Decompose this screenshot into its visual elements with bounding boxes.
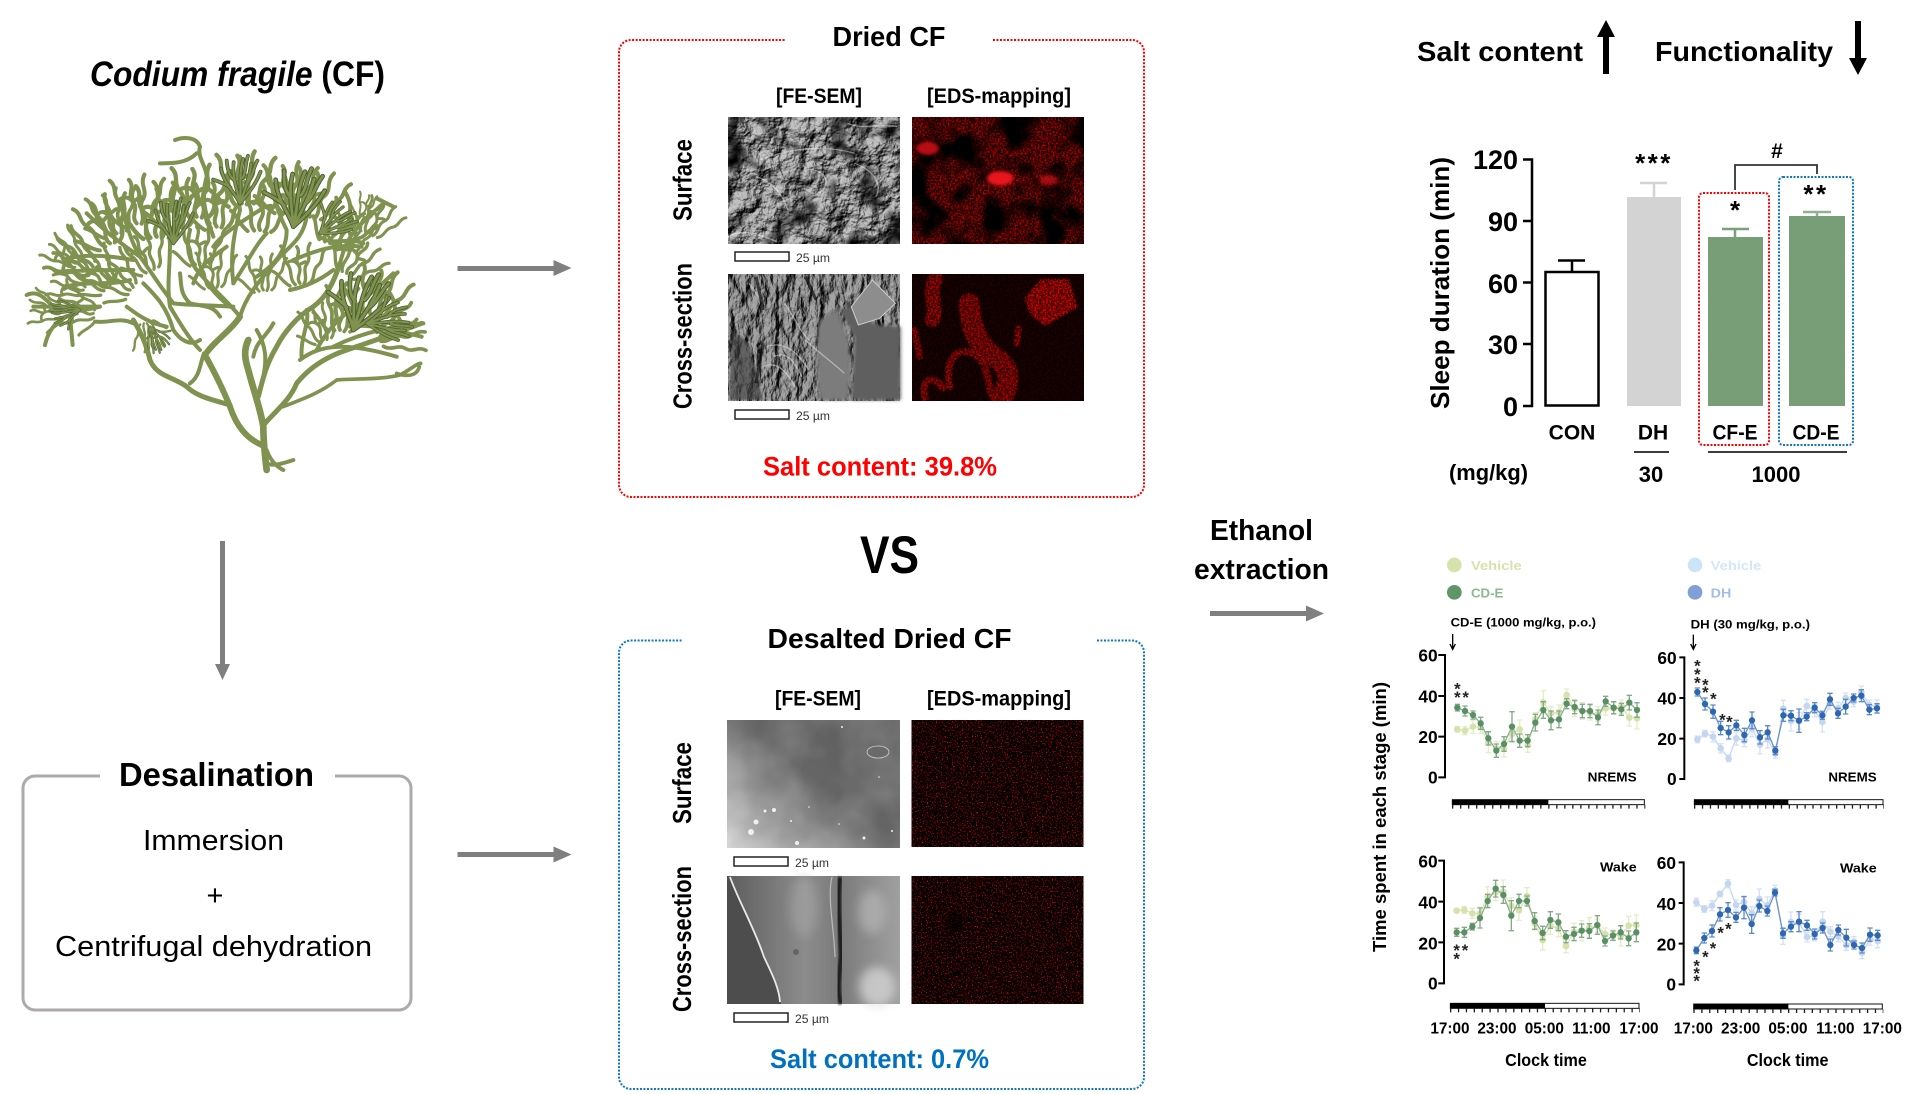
axis: 20: [1657, 935, 1676, 955]
bar: DH: [1627, 183, 1681, 406]
scale bar: cross-section: [735, 409, 830, 423]
line chart: Wake DH: [1657, 853, 1902, 1070]
time axis labels: [1430, 1020, 1659, 1037]
scale bar: surface: 25 µm: [796, 251, 830, 265]
axis: 60: [1657, 648, 1677, 668]
dosing annotation: DH (30 mg/kg, p.o.): [1691, 617, 1810, 631]
label: ethanol extraction: [1194, 515, 1329, 586]
line chart: NREMS CD-E: [1418, 558, 1645, 807]
column headers: [EDS-mapping]: [927, 688, 1071, 710]
y axis: 90: [1488, 207, 1518, 237]
micrograph: EDS surface: [912, 720, 1084, 847]
time axis labels: 05:00: [1768, 1020, 1808, 1037]
bar: CF-E: [1708, 229, 1763, 406]
series: DH: [1695, 688, 1880, 755]
arrow: to results: [1210, 606, 1324, 622]
significance stars: ********: [1694, 657, 1733, 732]
micrograph: EDS cross-section: [912, 274, 1084, 401]
legend: Vehicle: [1711, 558, 1761, 573]
significance stars: ***: [1635, 148, 1673, 178]
axis: 40: [1657, 894, 1676, 914]
time axis labels: 17:00: [1430, 1020, 1470, 1037]
title: Codium fragile (CF): [90, 55, 385, 94]
column headers: [776, 85, 1071, 108]
heading: desalted dried CF: Desalted Dried CF: [768, 623, 1012, 654]
legend: CD-E: [1471, 585, 1503, 600]
series: CD-E: [1454, 880, 1639, 946]
legend: Vehicle: [1471, 558, 1522, 573]
row label: cross-section: Cross-section: [668, 263, 698, 409]
bar chart: sleep duration: [1425, 140, 1853, 487]
text: steps: Immersion: [143, 825, 284, 857]
series: CD-E: [1455, 695, 1640, 757]
x axis title: Clock time: [1747, 1050, 1829, 1070]
header: functionality down: Functionality: [1655, 36, 1833, 67]
column headers: [775, 688, 1071, 710]
significance stars: *: [1730, 195, 1741, 225]
line chart: NREMS DH: [1657, 558, 1884, 807]
axis: 40: [1418, 686, 1438, 706]
axis: [1418, 851, 1444, 993]
highlight: CF-E: [1699, 193, 1769, 445]
light/dark bar: [1452, 800, 1645, 807]
series: vehicle: [1695, 686, 1880, 762]
significance stars: *******: [1693, 920, 1732, 990]
line chart: Wake CD-E: [1418, 851, 1659, 1070]
stage label: Wake: [1840, 861, 1877, 876]
axis: 0: [1428, 973, 1438, 993]
time axis labels: 05:00: [1525, 1020, 1564, 1037]
scale bar: cross-section: 25 µm: [796, 409, 830, 423]
legend: [1447, 558, 1522, 600]
column headers: [FE-SEM]: [776, 85, 862, 108]
micrograph: FE-SEM cross-section: [728, 274, 901, 401]
axis: [1657, 853, 1684, 995]
axis: [1657, 648, 1684, 789]
micrograph: FE-SEM surface: [727, 720, 900, 848]
significance stars: **: [1803, 179, 1829, 209]
y axis: 60: [1488, 269, 1518, 299]
label: ethanol extraction: Ethanol: [1210, 515, 1313, 547]
axis: 20: [1418, 933, 1438, 953]
significance stars: ***: [1453, 941, 1469, 969]
dosing annotation: [1691, 617, 1810, 649]
highlight: CD-E: [1779, 177, 1853, 445]
column headers: [FE-SEM]: [775, 688, 861, 710]
scale bar: surface: 25 µm: [795, 856, 829, 870]
dosing annotation: [1450, 616, 1596, 649]
header: functionality down: [1655, 21, 1867, 75]
light/dark bar: [1450, 1003, 1640, 1010]
heading: desalination: Desalination: [119, 756, 314, 793]
panel: dried CF: [619, 21, 1144, 497]
heading: dried CF: Dried CF: [832, 21, 946, 52]
dose labels: 1000: [1752, 462, 1800, 487]
arrow: to desalted dried CF: [458, 846, 572, 862]
series: vehicle: [1455, 689, 1640, 757]
series: vehicle: [1454, 880, 1639, 953]
significance stars: ***: [1454, 679, 1469, 707]
axis: 40: [1418, 892, 1438, 912]
series: DH: [1694, 889, 1880, 954]
icon: up arrow: [1597, 20, 1615, 74]
seaweed illustration: Codium fragile: [25, 138, 431, 470]
micrograph: FE-SEM surface: [728, 117, 900, 244]
dosing annotation: CD-E (1000 mg/kg, p.o.): [1451, 616, 1596, 630]
y axis: 120: [1473, 145, 1518, 175]
axis: 0: [1428, 767, 1438, 787]
header: salt content up: Salt content: [1417, 36, 1583, 67]
comparison bracket: [1735, 165, 1817, 190]
dose labels: [1449, 452, 1847, 487]
salt content: desalted: Salt content: 0.7%: [770, 1044, 989, 1074]
y axis: 30: [1488, 330, 1518, 360]
panel: desalted dried CF: [619, 623, 1144, 1089]
text: steps: [55, 825, 372, 963]
axis: [1418, 646, 1445, 787]
arrow: to dried CF: [458, 260, 572, 276]
icon: down arrow: [1849, 21, 1867, 75]
panel: desalination process: [23, 756, 411, 1010]
series: vehicle: [1694, 880, 1880, 959]
scale bar: cross-section: [734, 1012, 829, 1026]
time axis labels: 11:00: [1816, 1020, 1855, 1037]
legend: DH: [1711, 585, 1731, 600]
y axis label: line charts: Time spent in each stage (min): [1370, 682, 1390, 952]
axis: 20: [1418, 727, 1438, 747]
light/dark bar: [1693, 1004, 1883, 1011]
time axis labels: 17:00: [1674, 1020, 1713, 1037]
time axis labels: 17:00: [1619, 1020, 1659, 1037]
y axis label: Sleep duration (min): [1425, 157, 1455, 409]
row label: surface: Surface: [668, 139, 698, 221]
dose labels: 30: [1639, 462, 1663, 487]
axis: 60: [1418, 646, 1438, 666]
stage label: Wake: [1600, 860, 1637, 875]
group labels: CD-E: [1792, 422, 1840, 444]
micrograph: FE-SEM cross-section: [727, 876, 900, 1007]
stage label: NREMS: [1828, 770, 1877, 785]
time axis labels: 11:00: [1572, 1020, 1611, 1037]
light/dark bar: [1694, 800, 1884, 807]
y axis: 0: [1503, 392, 1518, 422]
micrograph: EDS surface: [912, 117, 1084, 244]
axis: 60: [1657, 853, 1676, 873]
time axis labels: [1674, 1020, 1902, 1037]
time axis labels: 23:00: [1721, 1020, 1760, 1037]
label: ethanol extraction: extraction: [1194, 554, 1329, 586]
significance stars: [1635, 140, 1829, 225]
micrograph: EDS cross-section: [912, 876, 1084, 1004]
y axis: [1473, 145, 1532, 422]
arrow: down to desalination: [215, 541, 230, 680]
scale bar: surface: [734, 856, 829, 870]
time axis labels: 17:00: [1863, 1020, 1902, 1037]
axis: 20: [1657, 729, 1677, 749]
VS label: VS: [860, 526, 919, 585]
x axis title: Clock time: [1505, 1050, 1587, 1070]
text: steps: +: [207, 880, 223, 912]
time axis labels: 23:00: [1477, 1020, 1517, 1037]
group labels: CF-E: [1712, 422, 1758, 444]
axis: 40: [1657, 688, 1677, 708]
salt content: dried: Salt content: 39.8%: [763, 452, 997, 482]
axis: 60: [1418, 851, 1438, 871]
group labels: CON: [1549, 422, 1595, 444]
header: salt content up: [1417, 20, 1615, 74]
axis: 0: [1667, 769, 1677, 789]
axis: 0: [1666, 975, 1676, 995]
scale bar: surface: [735, 251, 830, 265]
group labels: DH: [1638, 422, 1668, 444]
bar: CD-E: [1789, 212, 1845, 406]
scale bar: cross-section: 25 µm: [795, 1012, 829, 1026]
bar: CON: [1546, 260, 1598, 406]
row label: surface: Surface: [667, 742, 697, 824]
legend: [1688, 558, 1761, 600]
significance stars: #: [1771, 140, 1783, 163]
column headers: [EDS-mapping]: [927, 85, 1071, 108]
text: steps: Centrifugal dehydration: [55, 931, 372, 963]
dose labels: (mg/kg): [1449, 460, 1528, 485]
stage label: NREMS: [1588, 770, 1637, 785]
group labels: [1549, 422, 1840, 444]
row label: cross-section: Cross-section: [667, 866, 697, 1012]
